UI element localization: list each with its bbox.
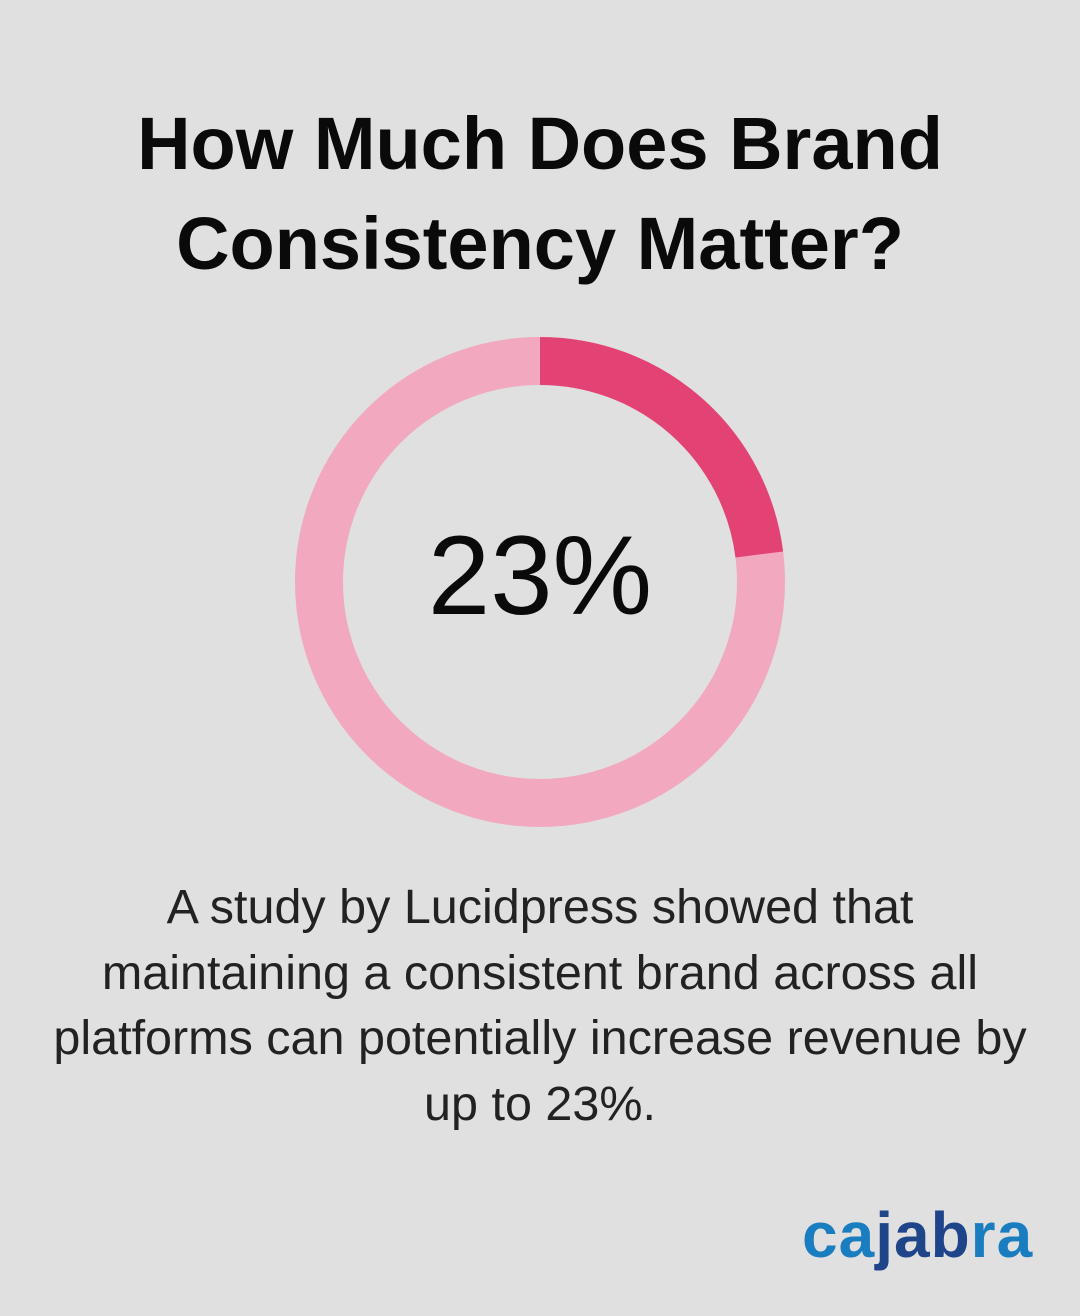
body text xyxy=(53,880,1027,1130)
title: Consistency Matter? xyxy=(176,202,904,285)
title xyxy=(137,102,943,285)
title: How Much Does Brand xyxy=(137,102,943,185)
logo: cajabra xyxy=(802,1199,1033,1271)
donut chart: 23% xyxy=(428,513,652,638)
body text: up to 23%. xyxy=(424,1076,656,1130)
body text: A study by Lucidpress showed that xyxy=(167,880,913,934)
body text: platforms can potentially increase revenue by xyxy=(53,1011,1027,1065)
body text: maintaining a consistent brand across all xyxy=(102,946,978,1000)
